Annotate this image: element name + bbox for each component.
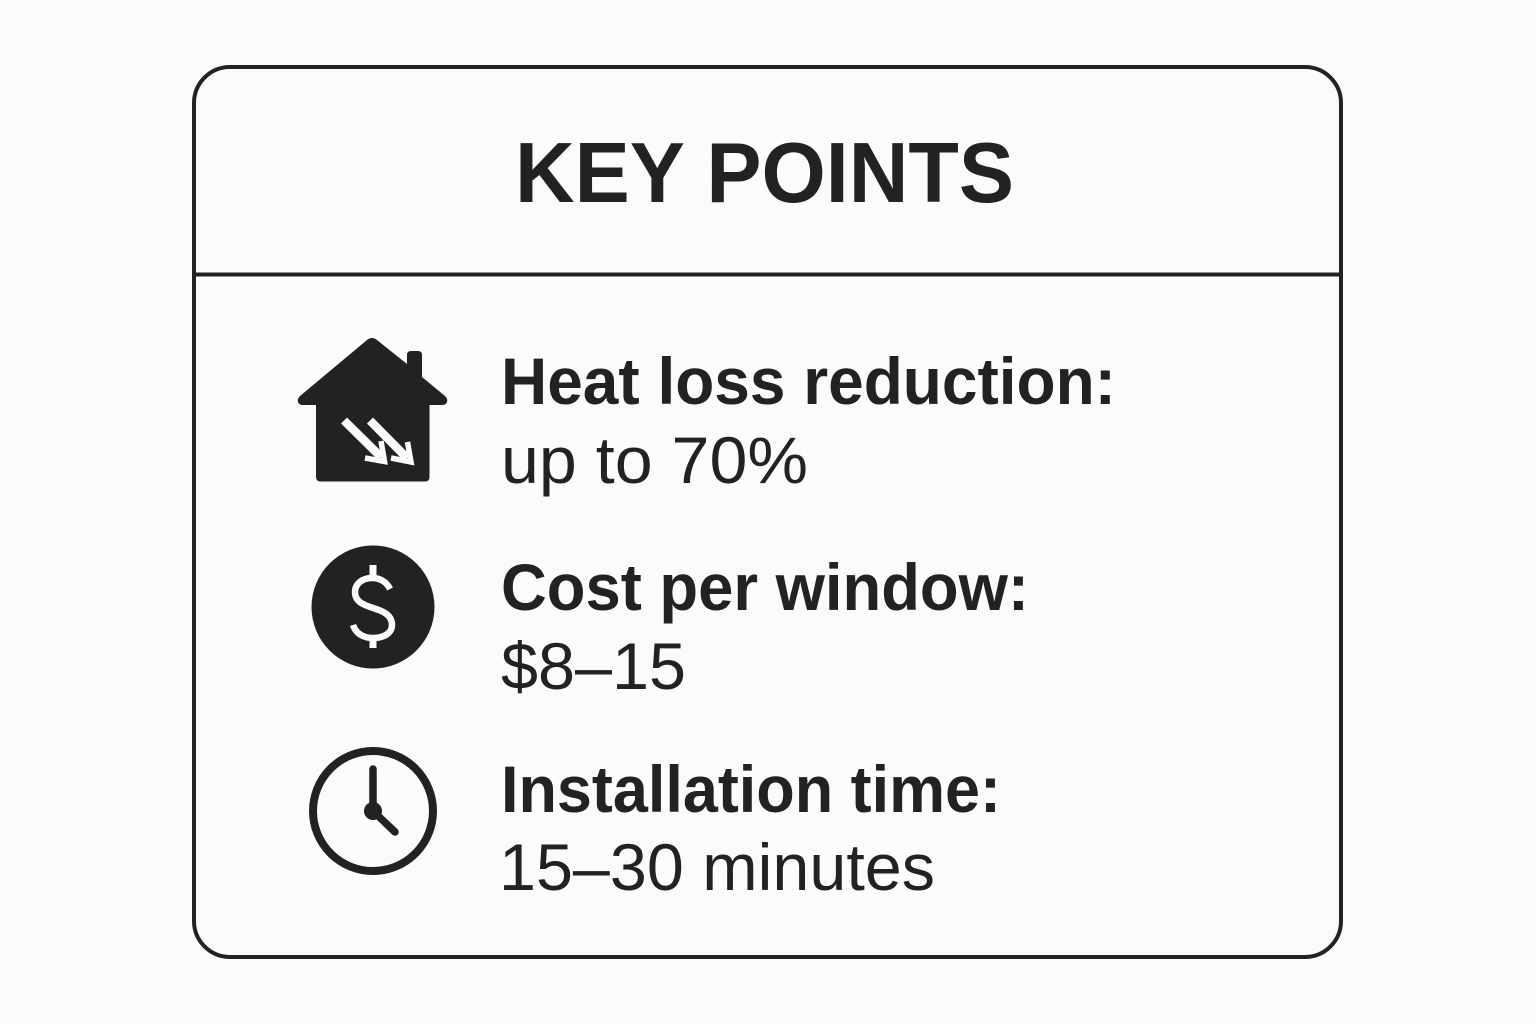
heading: key points: KEY POINTS (515, 126, 1014, 221)
text: installation time value: 15–30 minutes (499, 830, 935, 904)
text: cost per window label: Cost per window: (501, 550, 1029, 624)
text: heat loss reduction value: up to 70% (501, 423, 808, 497)
icon: dollar coin (312, 546, 434, 668)
text: installation time label: Installation time: (501, 752, 1001, 826)
text: cost per window value: $8–15 (501, 629, 686, 703)
panel: key points card (194, 67, 1341, 957)
text: heat loss reduction label: Heat loss reduction: (501, 344, 1116, 418)
icon: house with heat loss arrows (298, 338, 447, 482)
row: heat loss reduction (298, 338, 1116, 497)
icon: clock (313, 751, 433, 871)
row: installation time (313, 751, 1001, 904)
row: cost per window (312, 546, 1029, 703)
